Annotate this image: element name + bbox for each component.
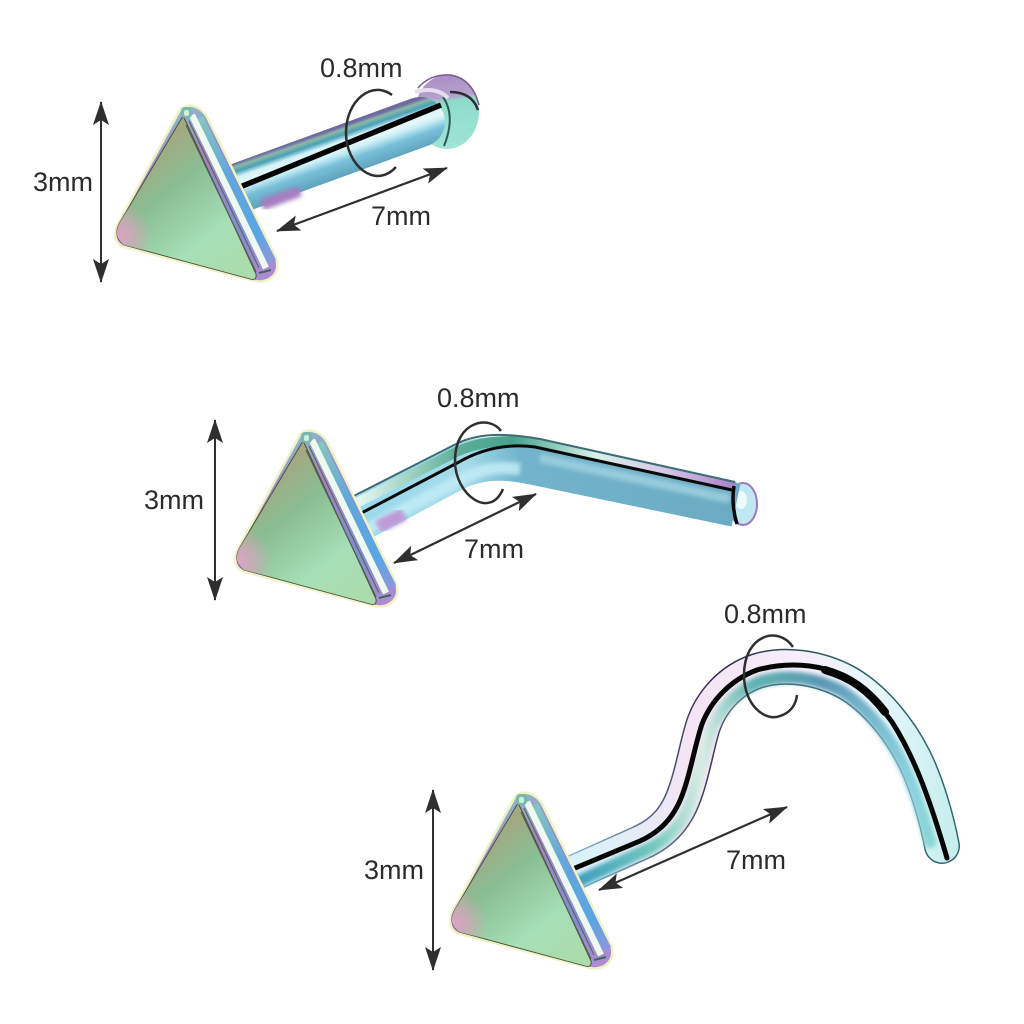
label 3mm: 3mm [364,855,424,885]
measurement set 3 [364,599,807,970]
length arrow 3 [599,807,787,890]
length arrow 2 [394,494,536,563]
label 3mm: 3mm [33,167,93,197]
stud 2: L-shaped bend [235,431,757,606]
label 0.8mm: 0.8mm [437,383,520,413]
diameter ring 2 [455,423,503,503]
triangle head 1 [115,106,277,282]
diameter ring 1 [346,90,396,176]
stud 1: straight post [115,75,479,282]
post ball head [415,75,479,149]
stud 3: screw curve [450,665,947,968]
height arrow 2 [214,420,216,600]
triangle head 2 [235,431,397,606]
L-bend tip [729,483,757,525]
length arrow 1 [277,168,447,231]
label 3mm: 3mm [144,485,204,515]
measurement set 1 [33,53,447,282]
L-bend shaft [340,435,737,530]
screw shaft [555,665,947,890]
label 0.8mm: 0.8mm [320,53,403,83]
height arrow 1 [100,102,102,282]
height arrow 3 [432,790,434,970]
label 7mm: 7mm [464,534,524,564]
diameter ring 3 [744,636,797,717]
label 7mm: 7mm [371,201,431,231]
label 0.8mm: 0.8mm [724,599,807,629]
triangle head 3 [450,793,612,968]
post shaft [228,90,450,205]
label 7mm: 7mm [726,845,786,875]
measurement set 2 [144,383,536,600]
